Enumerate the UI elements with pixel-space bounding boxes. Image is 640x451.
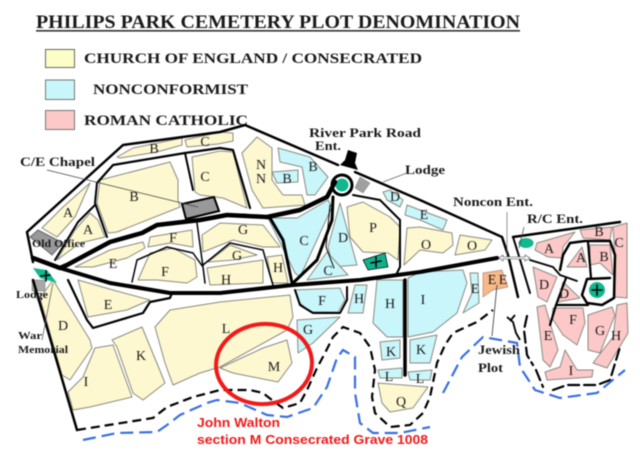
legend: nonconformist bbox=[46, 80, 248, 100]
plot letters: C bbox=[299, 234, 309, 249]
icon: tomb plot P bbox=[363, 253, 388, 270]
label: Jewish Plot bbox=[478, 285, 521, 375]
caption: grave details: John Walton bbox=[197, 416, 280, 430]
label: River Park Road Ent.: Ent. bbox=[315, 138, 341, 153]
jewish plot bbox=[483, 270, 508, 297]
label: Noncon Ent.: Noncon Ent. bbox=[453, 194, 533, 209]
plot letters: K bbox=[136, 349, 146, 364]
roads and boundaries bbox=[27, 125, 620, 430]
black dashed path bbox=[77, 310, 493, 430]
label: Lodge west: Lodge bbox=[16, 290, 49, 301]
plot letters: I bbox=[569, 364, 574, 379]
legend: church of england bbox=[46, 50, 422, 68]
icon: lodge west bbox=[32, 280, 45, 291]
plot letters: C bbox=[323, 264, 333, 279]
plot letters: E bbox=[420, 208, 428, 223]
label: Jewish Plot: Plot bbox=[478, 360, 504, 375]
plot letters: K bbox=[386, 345, 396, 360]
plot letters: A bbox=[63, 206, 74, 221]
highlight circle: grave location bbox=[213, 320, 315, 408]
label: War Memorial: Memorial bbox=[18, 345, 68, 356]
plot letters: L bbox=[416, 372, 424, 387]
arrow: noncon entrance bbox=[499, 255, 530, 261]
icon: north circle bbox=[336, 178, 348, 192]
plot letters: I bbox=[421, 293, 426, 308]
plot letters: O bbox=[467, 239, 477, 254]
legend: church of england: CHURCH OF ENGLAND / CONSECRATED bbox=[84, 51, 422, 67]
plot letters: E bbox=[499, 273, 507, 288]
label: River Park Road Ent. bbox=[309, 125, 422, 153]
plot letters: F bbox=[569, 313, 577, 328]
blue dashed path bbox=[83, 337, 625, 440]
plot letters bbox=[58, 135, 624, 410]
icon: lodge west green bbox=[33, 268, 57, 283]
plot letters: G bbox=[238, 223, 248, 238]
plot letters: N bbox=[256, 172, 266, 187]
plot letters: B bbox=[599, 250, 609, 265]
black path fragment bbox=[507, 315, 520, 340]
label: War Memorial bbox=[18, 283, 68, 356]
plot letters: H bbox=[611, 329, 621, 344]
plot letters: D bbox=[338, 231, 348, 246]
plot letters: B bbox=[594, 225, 604, 240]
label: R/C Ent. bbox=[519, 211, 583, 248]
plot letters: O bbox=[421, 238, 431, 253]
plot letters: H bbox=[221, 273, 231, 288]
plot letters: E bbox=[471, 282, 479, 297]
plot letters: D bbox=[559, 287, 569, 302]
plot letters: B bbox=[129, 190, 139, 205]
title: PHILIPS PARK CEMETERY PLOT DENOMINATION bbox=[36, 12, 520, 33]
label: Jewish Plot: Jewish bbox=[478, 342, 521, 357]
plot letters: F bbox=[318, 294, 326, 309]
black dashed path east bbox=[524, 316, 620, 390]
icon: north lodge bbox=[355, 177, 370, 193]
plot letters: H bbox=[385, 297, 395, 312]
buildings and tombs bbox=[30, 150, 605, 298]
icon: RC entrance green bbox=[518, 238, 534, 248]
legend: nonconformist: NONCONFORMIST bbox=[93, 82, 248, 98]
label: Lodge north bbox=[383, 162, 445, 182]
label: War Memorial: War bbox=[18, 331, 43, 342]
plot letters: I bbox=[84, 375, 89, 390]
label: Old Office: Old Office bbox=[32, 239, 86, 250]
caption: grave details: section M Consecrated Grave 1008 bbox=[197, 433, 428, 447]
map plots: nonconformist bbox=[268, 148, 479, 380]
label: R/C Ent.: R/C Ent. bbox=[527, 211, 583, 226]
plot letters: F bbox=[161, 265, 169, 280]
icon: chapel bbox=[182, 197, 219, 219]
plot letters: H bbox=[273, 261, 283, 276]
plot letters: P bbox=[369, 221, 377, 236]
plot letters: Q bbox=[396, 395, 406, 410]
plot letters: A bbox=[576, 251, 587, 266]
plot letters: A bbox=[83, 223, 94, 238]
plot letters: N bbox=[256, 158, 266, 173]
plot letters: F bbox=[169, 231, 177, 246]
label: C/E Chapel bbox=[20, 154, 198, 207]
plot letters: D bbox=[390, 190, 400, 205]
plot letters: L bbox=[385, 370, 393, 385]
plot letters: G bbox=[595, 324, 605, 339]
map plots: roman catholic bbox=[533, 223, 628, 380]
plot letters: C bbox=[614, 236, 624, 251]
plot letters: C bbox=[200, 135, 210, 150]
annotation labels bbox=[16, 125, 583, 375]
plot letters: H bbox=[354, 292, 364, 307]
plot letters: C bbox=[200, 170, 210, 185]
icon: river park gate bbox=[340, 150, 358, 170]
icon: RC circle bbox=[589, 282, 605, 298]
plot letters: D bbox=[58, 319, 68, 334]
label: C/E Chapel: C/E Chapel bbox=[20, 154, 95, 169]
plot letters: K bbox=[416, 343, 426, 358]
plot letters: B bbox=[149, 142, 159, 157]
legend bbox=[46, 50, 422, 130]
plot letters: B bbox=[308, 160, 318, 175]
icon: old office bbox=[30, 230, 63, 255]
map plots: church of england bbox=[40, 132, 492, 412]
plot letters: L bbox=[222, 322, 230, 337]
legend: roman catholic: ROMAN CATHOLIC bbox=[84, 113, 248, 129]
plot letters: G bbox=[232, 249, 242, 264]
label: Noncon Ent. bbox=[453, 194, 533, 256]
plot letters: A bbox=[544, 242, 555, 257]
plot letters: B bbox=[282, 172, 292, 187]
plot letters: G bbox=[303, 323, 313, 338]
label: River Park Road Ent.: River Park Road bbox=[309, 125, 422, 140]
plot letters: E bbox=[104, 298, 112, 313]
plot letters: D bbox=[539, 278, 549, 293]
plot letters: M bbox=[268, 360, 281, 375]
label: Lodge north: Lodge bbox=[405, 162, 445, 177]
legend: roman catholic bbox=[46, 110, 248, 130]
plot letters: E bbox=[109, 257, 117, 272]
caption: grave details bbox=[197, 416, 428, 447]
plot letters: E bbox=[544, 329, 552, 344]
plot letters: E bbox=[488, 273, 496, 288]
